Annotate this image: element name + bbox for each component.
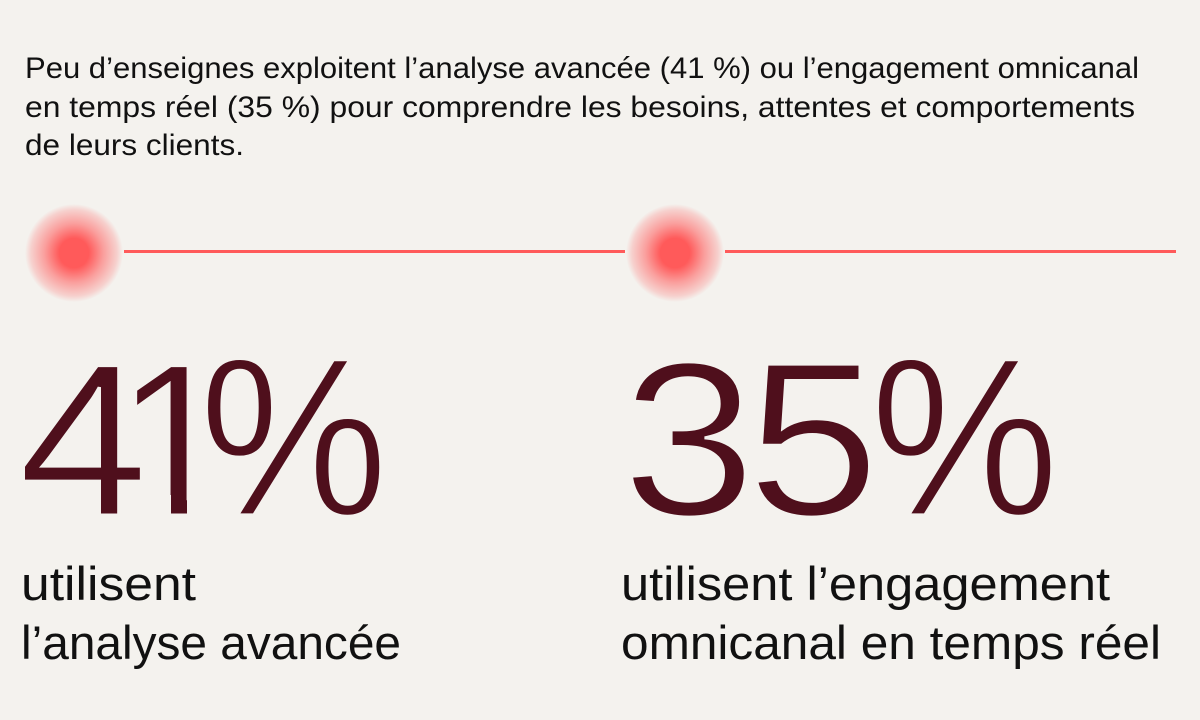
- big number 41%: 4: [18, 318, 148, 561]
- intro text: [25, 52, 1139, 162]
- label 35%: [621, 557, 1161, 669]
- big number 41%: [25, 360, 380, 515]
- big number 35%: 3: [622, 317, 756, 562]
- big number 41%: 1: [115, 318, 235, 561]
- label 41%: utilisent: [21, 557, 196, 610]
- timeline line: second segment: [725, 250, 1176, 253]
- timeline line: first segment: [124, 250, 625, 253]
- big number 35%: 5: [747, 317, 880, 562]
- icon: glowing dot 41%: [25, 204, 123, 302]
- big number 35%: [622, 311, 1059, 563]
- label 35%: utilisent l’engagement: [621, 557, 1110, 610]
- label 41%: l’analyse avancée: [21, 616, 401, 669]
- label 41%: [21, 557, 401, 669]
- intro text: Peu d’enseignes exploitent l’analyse avancée (41 %) ou l’engagement omnicanal: [25, 52, 1139, 85]
- icon: glowing dot 35%: [626, 204, 724, 302]
- intro text: en temps réel (35 %) pour comprendre les besoins, attentes et comportements: [25, 91, 1135, 124]
- label 35%: omnicanal en temps réel: [621, 616, 1161, 669]
- big number 35%: %: [870, 311, 1059, 563]
- big number 41%: %: [199, 311, 388, 563]
- intro text: de leurs clients.: [25, 129, 244, 162]
